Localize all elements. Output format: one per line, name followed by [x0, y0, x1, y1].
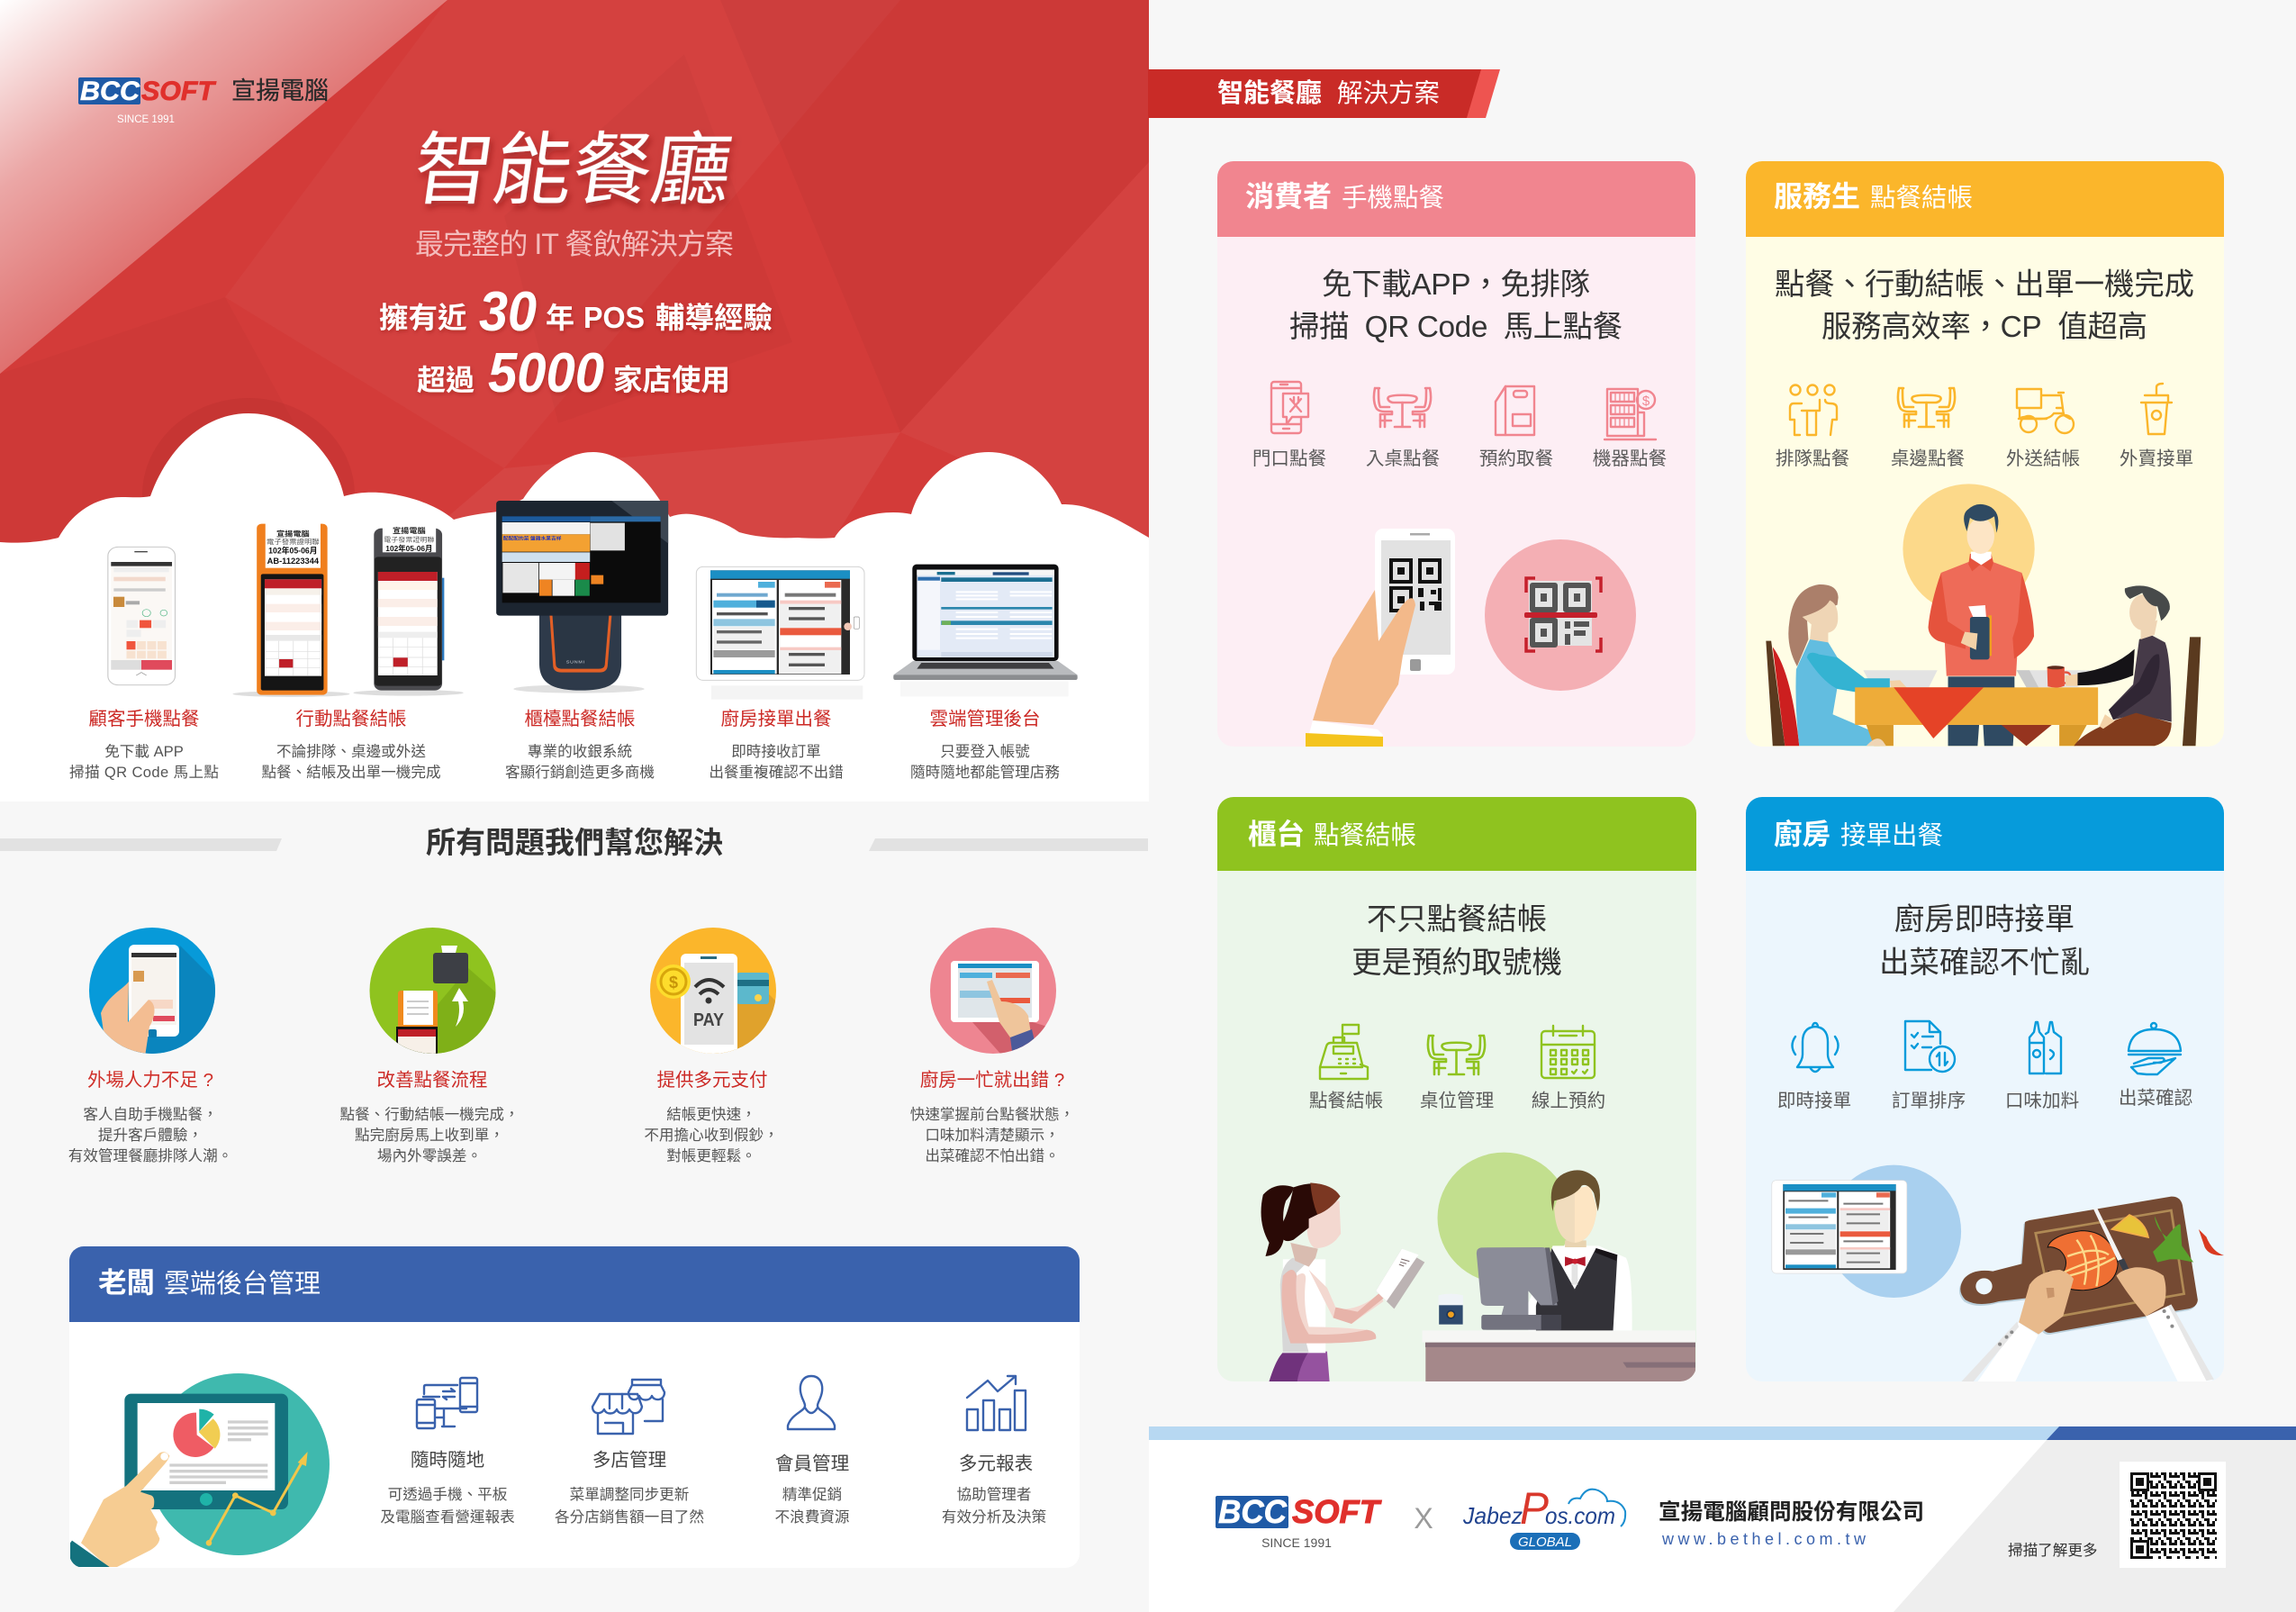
- device: black mobile POS: 電子發票證明聯: [384, 535, 435, 543]
- card headline: [1775, 268, 2194, 344]
- icon: queue: [1790, 385, 1837, 435]
- icon: member: [788, 1376, 835, 1429]
- panel title: 雲端後台管理: [164, 1269, 321, 1299]
- card headline: 不只點餐結帳: [1367, 903, 1547, 937]
- icon: stores: [592, 1380, 664, 1434]
- label: customer phone ordering: [69, 709, 219, 781]
- problem text: staff shortage: 提升客戶體驗，: [98, 1127, 203, 1144]
- cloud: [0, 413, 1149, 801]
- device: orange mobile POS: 102年05-06月: [268, 545, 318, 556]
- panel title: [98, 1266, 321, 1299]
- icon: multiple payment: [650, 928, 776, 1054]
- device: counter POS terminal: 配配配的菜 盤雞水果吉祥: [503, 535, 562, 541]
- logo: BCC SOFT: SINCE 1991: [117, 114, 175, 125]
- feature: multi store: 各分店銷售額一目了然: [555, 1508, 704, 1526]
- heading: problems: 所有問題我們幫您解決: [426, 826, 723, 859]
- icon: order document: [1905, 1021, 1955, 1072]
- label: mobile ordering: 不論排隊、桌邊或外送: [276, 743, 426, 760]
- illustration: waiter taking order: [1766, 484, 2201, 746]
- icon: drink: [2141, 384, 2172, 434]
- logo: JabezPos: [1462, 1483, 1625, 1550]
- icon labels: 點餐結帳: [1309, 1091, 1383, 1111]
- icon labels: 外賣接單: [2120, 448, 2193, 469]
- icon: table: [1374, 388, 1431, 427]
- label: kitchen: 出餐重複確認不出錯: [709, 764, 844, 781]
- label: cloud backend: 雲端管理後台: [929, 709, 1041, 729]
- card headline: [1289, 268, 1623, 344]
- card title: 手機點餐: [1342, 184, 1444, 213]
- label: mobile ordering: [261, 709, 441, 781]
- logo: BCC SOFT: 宣揚電腦: [231, 77, 329, 104]
- device: tablet: [696, 566, 864, 700]
- card title: 消費者: [1245, 180, 1332, 213]
- panel: consumer: [1217, 161, 1695, 747]
- icon: ordering flow: [369, 928, 495, 1054]
- card headline: 掃描 QR Code 馬上點餐: [1289, 311, 1623, 344]
- logo: BCC SOFT footer: SINCE 1991: [1261, 1535, 1332, 1550]
- label: mobile ordering: 行動點餐結帳: [295, 709, 407, 729]
- problem text: payment: 結帳更快速，: [666, 1106, 756, 1123]
- label: cloud backend: [910, 709, 1060, 781]
- card title: [1245, 180, 1444, 213]
- card headline: 點餐、行動結帳、出單一機完成: [1775, 268, 2194, 302]
- feature: members: 會員管理: [775, 1454, 849, 1474]
- illustration: kitchen tablet and chopping board: [1772, 1165, 2224, 1384]
- icon: calendar: [1541, 1026, 1595, 1078]
- card headline: [1879, 903, 2090, 980]
- logo: BCC SOFT footer: SOFT: [1292, 1493, 1382, 1530]
- device: customer phone: [108, 547, 175, 685]
- stat: 30 years: POS: [583, 301, 645, 334]
- logo: JabezPos: P: [1520, 1483, 1550, 1534]
- footer: [1149, 1426, 2296, 1612]
- problem text: payment: [644, 1070, 779, 1164]
- feature: multi store: [555, 1380, 704, 1526]
- label: customer phone ordering: 顧客手機點餐: [88, 709, 200, 729]
- icon: devices: [417, 1378, 477, 1428]
- icon labels: 外送結帳: [2006, 448, 2080, 469]
- icon: kitchen tablet: [930, 928, 1056, 1054]
- icon: multiple payment: PAY: [693, 1010, 725, 1030]
- label: counter ordering: 客顯行銷創造更多商機: [505, 764, 655, 781]
- illustration: tablet dashboard: [70, 1373, 330, 1567]
- logo: JabezPos: GLOBAL: [1518, 1535, 1572, 1550]
- cross mark: X: [1414, 1502, 1433, 1535]
- problem text: order flow: [339, 1070, 520, 1164]
- label: kitchen: 廚房接單出餐: [720, 708, 832, 729]
- icon labels: 訂單排序: [1892, 1091, 1966, 1111]
- panel: counter: [1217, 797, 1696, 1382]
- red tab: solution heading: 解決方案: [1337, 79, 1440, 108]
- company name: 宣揚電腦顧問股份有限公司: [1659, 1499, 1924, 1525]
- card header: [1746, 797, 2224, 871]
- problem text: payment: 對帳更輕鬆。: [666, 1147, 756, 1164]
- problem text: kitchen mistakes: 快速掌握前台點餐狀態，: [910, 1106, 1074, 1123]
- red tab: solution heading: [1148, 69, 1500, 118]
- icon: takeaway bag: [1496, 386, 1534, 435]
- panel title: 老闆: [98, 1266, 155, 1299]
- icon: self ordering phone: [89, 928, 215, 1054]
- icon labels: 即時接單: [1777, 1091, 1851, 1111]
- stat: 30 years: 年: [546, 302, 574, 334]
- card headline: 免下載APP，免排隊: [1322, 268, 1590, 302]
- problem text: payment: 不用擔心收到假鈔，: [644, 1127, 779, 1144]
- logo: BCC SOFT footer: BCC: [1218, 1493, 1288, 1530]
- feature: multi store: 多店管理: [592, 1450, 666, 1471]
- label: counter ordering: [505, 709, 655, 781]
- problem text: payment: 提供多元支付: [657, 1070, 767, 1091]
- icon: vending machine: [1604, 389, 1656, 439]
- divider bars: [0, 838, 282, 851]
- icon: bell: [1792, 1023, 1839, 1072]
- device: black mobile POS: 102年05-06月: [385, 544, 432, 553]
- icon labels: 桌位管理: [1420, 1091, 1494, 1111]
- card headline: 廚房即時接單: [1894, 903, 2075, 937]
- problem text: kitchen mistakes: 出菜確認不怕出錯。: [925, 1147, 1060, 1164]
- feature: members: 不浪費資源: [775, 1508, 850, 1526]
- feature: members: [775, 1376, 850, 1526]
- card header: [1217, 797, 1696, 871]
- QR code: [2120, 1462, 2226, 1568]
- feature: reports: 協助管理者: [957, 1486, 1031, 1503]
- panel: boss cloud backend: [69, 1246, 1080, 1568]
- feature: reports: 有效分析及決策: [942, 1508, 1046, 1526]
- label: kitchen: [709, 708, 844, 781]
- feature: anywhere: [380, 1378, 515, 1526]
- device: laptop: [893, 565, 1078, 696]
- icon labels: 桌邊點餐: [1891, 448, 1965, 469]
- problem text: kitchen mistakes: [910, 1069, 1074, 1164]
- icon: chart: [967, 1376, 1026, 1430]
- feature: multi store: 菜單調整同步更新: [570, 1486, 689, 1503]
- illustration: cashier and customer: [1261, 1153, 1695, 1382]
- icon labels: 排隊點餐: [1776, 448, 1849, 469]
- panel: kitchen: [1746, 797, 2224, 1384]
- label: customer phone ordering: 免下載 APP: [104, 743, 184, 760]
- website: www.bethel.com.tw: [1661, 1530, 1867, 1548]
- logo: JabezPos: os.com: [1545, 1502, 1615, 1529]
- label: kitchen: 即時接收訂單: [731, 743, 821, 760]
- label: mobile ordering: 點餐、結帳及出單一機完成: [261, 764, 441, 781]
- problem text: order flow: 點完廚房馬上收到單，: [355, 1126, 504, 1144]
- card headline: 更是預約取號機: [1351, 946, 1562, 980]
- device: counter POS terminal: SUNMI: [566, 660, 585, 666]
- icon labels: [1777, 1088, 2192, 1111]
- card title: 服務生: [1774, 180, 1860, 213]
- icon labels: [1776, 448, 2193, 469]
- icon labels: 出菜確認: [2119, 1088, 2192, 1109]
- subtitle: 最完整的 IT 餐飲解決方案: [415, 228, 734, 260]
- device: orange mobile POS: AB-11223344: [267, 557, 319, 566]
- icon labels: [1309, 1091, 1605, 1111]
- problem text: staff shortage: 外場人力不足 ?: [87, 1070, 213, 1091]
- card title: [1248, 818, 1416, 850]
- icon labels: 入桌點餐: [1366, 448, 1440, 469]
- problem text: kitchen mistakes: 廚房一忙就出錯 ?: [920, 1069, 1064, 1091]
- icon: scooter: [2017, 389, 2074, 433]
- problem text: staff shortage: 有效管理餐廳排隊人潮。: [68, 1147, 232, 1164]
- panel header: [69, 1246, 1080, 1322]
- card headline: 出菜確認不忙亂: [1879, 946, 2090, 980]
- scan label: 掃描了解更多: [2008, 1542, 2098, 1559]
- device: orange mobile POS: 宣揚電腦: [276, 529, 310, 538]
- icon labels: 機器點餐: [1593, 448, 1667, 469]
- feature: reports: 多元報表: [959, 1454, 1033, 1474]
- stat: 5000 stores: 家店使用: [613, 364, 730, 396]
- problem text: order flow: 點餐、行動結帳一機完成，: [339, 1106, 520, 1123]
- problem text: kitchen mistakes: 口味加料清楚顯示，: [925, 1127, 1060, 1144]
- card title: [1774, 818, 1943, 850]
- feature: anywhere: 可透過手機、平板: [388, 1486, 508, 1503]
- panel: hero: [0, 0, 1149, 543]
- feature: members: 精準促銷: [782, 1486, 842, 1503]
- label: counter ordering: 專業的收銀系統: [528, 743, 632, 760]
- device: counter POS terminal: [496, 501, 668, 693]
- icon: cash register: [1320, 1025, 1368, 1079]
- icon: table: [1428, 1036, 1485, 1074]
- icon labels: 線上預約: [1532, 1091, 1605, 1111]
- label: cloud backend: 隨時隨地都能管理店務: [910, 764, 1060, 781]
- icon: multiple payment: $: [669, 974, 678, 992]
- logo: BCC SOFT footer: [1216, 1493, 1382, 1550]
- red tab: solution heading: 智能餐廳: [1217, 78, 1322, 108]
- logo: BCC SOFT: SOFT: [141, 77, 217, 106]
- feature: anywhere: 及電腦查看營運報表: [380, 1508, 515, 1526]
- problem text: order flow: 改善點餐流程: [376, 1070, 488, 1091]
- icon: serving cloche: [2129, 1023, 2181, 1074]
- stat: 30 years: 擁有近: [379, 302, 467, 334]
- icon: door ordering: [1271, 382, 1308, 433]
- stat: 30 years: 30: [479, 281, 537, 343]
- card title: 接單出餐: [1840, 821, 1943, 850]
- label: cloud backend: 只要登入帳號: [940, 743, 1030, 760]
- problem text: order flow: 場內外零誤差。: [377, 1147, 482, 1164]
- stat: 30 years: 輔導經驗: [655, 302, 773, 334]
- card title: 點餐結帳: [1870, 184, 1973, 213]
- stat: 5000 stores: [417, 342, 730, 404]
- stat: 5000 stores: 5000: [488, 342, 604, 404]
- card title: [1774, 180, 1973, 213]
- card header: [1746, 161, 2224, 237]
- icon: table: [1898, 388, 1955, 427]
- title: 智能餐廳: [408, 125, 737, 214]
- icon: sauce bottles: [2029, 1022, 2061, 1073]
- feature: reports: [942, 1376, 1046, 1526]
- card headline: [1351, 903, 1562, 980]
- stat: 5000 stores: 超過: [417, 364, 475, 396]
- stat: 30 years: [379, 281, 773, 343]
- card headline: 服務高效率，CP 值超高: [1821, 311, 2147, 344]
- icon labels: 預約取餐: [1479, 448, 1553, 469]
- icon: vending machine: $: [1642, 394, 1650, 409]
- label: customer phone ordering: 掃描 QR Code 馬上點: [69, 764, 219, 781]
- icon labels: [1252, 448, 1667, 469]
- card title: 點餐結帳: [1314, 821, 1416, 850]
- panel: waiter: [1746, 161, 2224, 747]
- cloud shadow: [142, 398, 355, 496]
- icon labels: 口味加料: [2005, 1091, 2079, 1111]
- problem text: staff shortage: 客人自助手機點餐，: [83, 1106, 218, 1123]
- label: counter ordering: 櫃檯點餐結帳: [524, 709, 636, 729]
- device: black mobile POS: 宣揚電腦: [393, 526, 426, 535]
- card title: 廚房: [1774, 818, 1830, 850]
- device: orange mobile POS: 電子發票證明聯: [267, 538, 320, 546]
- logo: BCC SOFT: BCC: [80, 77, 140, 106]
- card header: [1217, 161, 1695, 237]
- icon labels: 門口點餐: [1252, 448, 1326, 469]
- problem text: staff shortage: [68, 1070, 232, 1164]
- device: orange mobile POS: [232, 519, 350, 697]
- logo: JabezPos: Jabez: [1462, 1502, 1523, 1529]
- card title: 櫃台: [1248, 818, 1305, 850]
- illustration: phone scanning QR: [1306, 529, 1636, 747]
- device: black mobile POS: [353, 518, 464, 696]
- feature: anywhere: 隨時隨地: [411, 1450, 484, 1471]
- logo: BCC SOFT: [78, 77, 329, 125]
